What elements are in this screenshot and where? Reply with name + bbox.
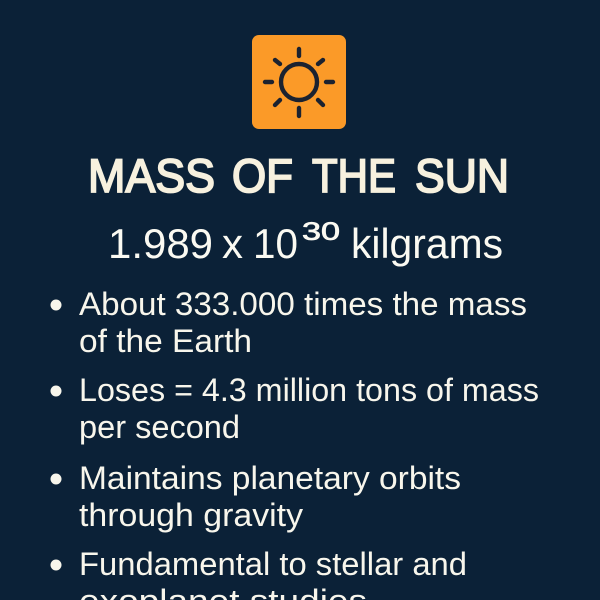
value: mass of the sun	[108, 218, 503, 267]
bullet: planetary orbits	[50, 460, 461, 533]
value: mass of the sun: kilgrams	[351, 220, 503, 267]
bullet: planetary orbits: Maintains planetary orbits	[79, 460, 461, 496]
value: mass of the sun: x	[222, 220, 243, 267]
bullet: mass loss	[50, 372, 539, 445]
bullet: stellar studies	[50, 546, 467, 600]
title: SUN	[415, 149, 509, 202]
title: MASS	[88, 149, 215, 202]
icon: sun on orange tile	[252, 35, 346, 129]
bullet: stellar studies: Fundamental to stellar and	[79, 546, 467, 582]
title: THE	[312, 149, 396, 202]
bullet: earth comparison	[50, 286, 527, 359]
title: OF	[232, 149, 293, 202]
title	[88, 149, 509, 202]
value: mass of the sun: 30	[302, 218, 340, 246]
value: mass of the sun: 10	[253, 220, 298, 267]
bullet: mass loss: Loses = 4.3 million tons of mass	[79, 372, 539, 408]
bullet: mass loss: per second	[79, 409, 240, 445]
bullet: earth comparison: About 333.000 times the mass	[79, 286, 527, 322]
value: mass of the sun: 1.989	[108, 220, 213, 267]
bullet: earth comparison: of the Earth	[79, 323, 252, 359]
bullet: planetary orbits: through gravity	[79, 497, 303, 533]
